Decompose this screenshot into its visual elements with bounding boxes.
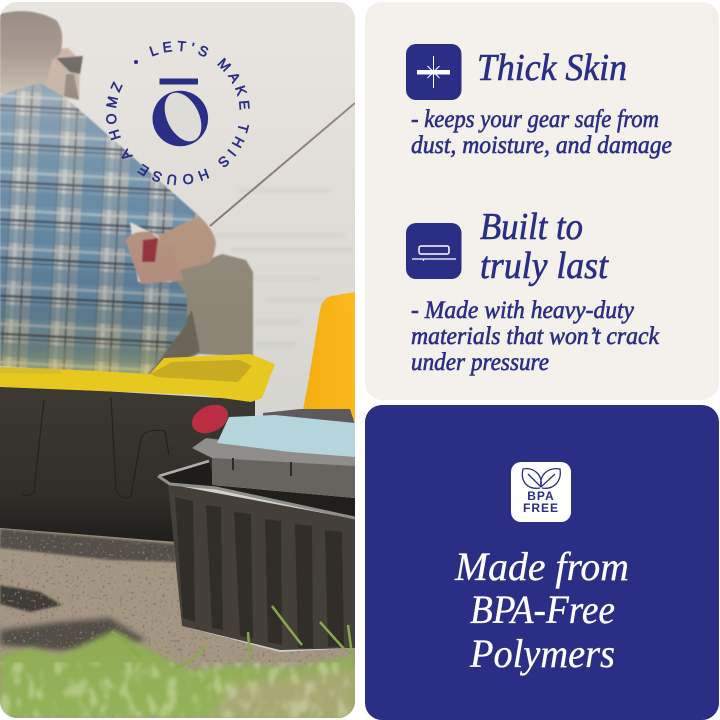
- panel: BPA-free: [365, 405, 719, 720]
- logo bar: [160, 78, 198, 84]
- text: thick skin description: [411, 106, 672, 159]
- panel: features: [365, 2, 719, 400]
- reel in hand: [142, 238, 158, 262]
- text: built to last description: [411, 297, 660, 376]
- back tote with yellow lid: [0, 354, 275, 542]
- blue towel: [217, 409, 355, 457]
- heading: Made from BPA-Free Polymers: BPA-Free: [470, 587, 615, 632]
- plaid shirt: [0, 83, 199, 377]
- panel: photo of man fishing with storage totes: [0, 2, 355, 718]
- circular Homz logo badge: [106, 40, 250, 186]
- icon: BPA free badge: BPA: [527, 489, 555, 503]
- icon: built to last: [406, 223, 462, 279]
- grass: [0, 606, 355, 718]
- water ripples: [200, 190, 355, 345]
- circular slogan: LET'S MAKE THIS HOUSE A HOMZ: [106, 40, 250, 186]
- icon: BPA free badge: [511, 462, 571, 522]
- text: built to last description: materials that won’t crack: [411, 323, 660, 350]
- heading: Built to truly last: truly last: [480, 245, 609, 287]
- heading: Made from BPA-Free Polymers: [454, 544, 629, 676]
- text: thick skin description: - keeps your gear safe from: [411, 106, 659, 133]
- yellow chair back: [302, 292, 355, 420]
- fisherman: [0, 11, 253, 377]
- heading: Made from BPA-Free Polymers: Polymers: [469, 631, 615, 676]
- logo circle: [152, 87, 209, 147]
- heading: Built to truly last: [480, 206, 609, 287]
- light haze over top of photo: [0, 10, 355, 263]
- logo dot: [134, 60, 138, 64]
- red fishing reel: [192, 404, 228, 434]
- icon: thick skin: [406, 44, 462, 100]
- icon: BPA free badge: FREE: [523, 501, 559, 515]
- upper grey tray: [192, 438, 355, 498]
- head: [40, 48, 80, 100]
- fishing rod: [210, 103, 355, 226]
- hands: [125, 232, 184, 284]
- text: thick skin description: dust, moisture, and damage: [411, 132, 672, 159]
- ground: [0, 528, 355, 718]
- trousers: [145, 254, 253, 377]
- text: built to last description: - Made with heavy-duty: [411, 297, 635, 324]
- front tote: [158, 460, 355, 650]
- heading: Thick Skin: Thick Skin: [477, 47, 627, 89]
- heading: Built to truly last: Built to: [480, 206, 583, 248]
- heading: Made from BPA-Free Polymers: Made from: [454, 544, 629, 589]
- forearm: [158, 216, 216, 270]
- text: built to last description: under pressure: [411, 349, 549, 376]
